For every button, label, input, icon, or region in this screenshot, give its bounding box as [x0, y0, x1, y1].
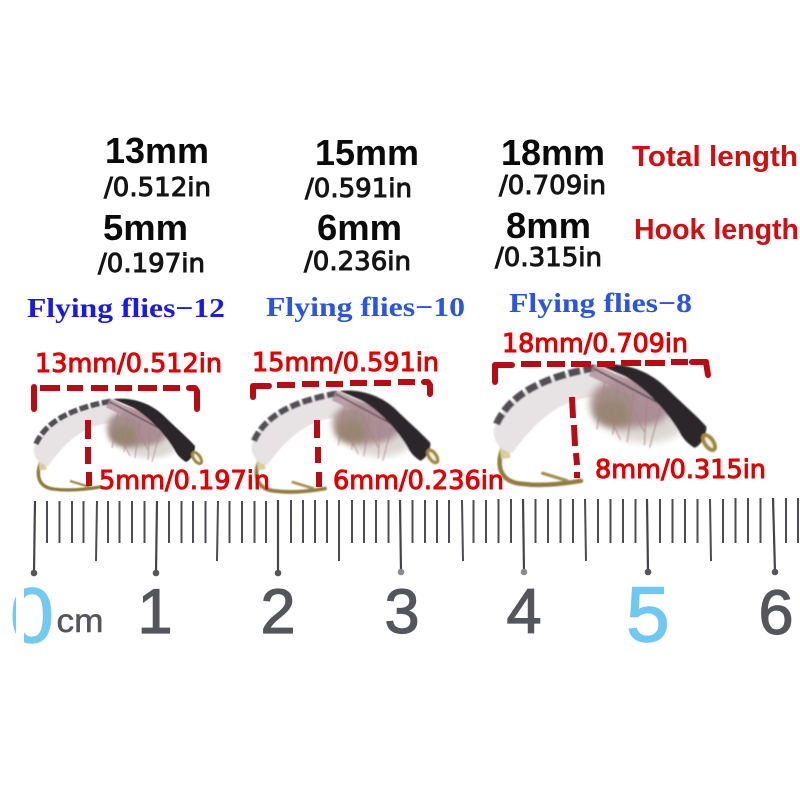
total length 15mm: 15mm: [315, 132, 419, 173]
total length label 2: 15mm/0.591in: [252, 348, 439, 378]
size column: Flying flies-12: [27, 130, 225, 323]
number 1: 1: [137, 577, 173, 647]
ruler: [10, 498, 798, 659]
size column: Flying flies-10: [266, 132, 465, 322]
hook length label 3: 8mm/0.315in: [595, 455, 766, 485]
row label: hook length: Hook length: [634, 214, 799, 246]
hook length label 2: 6mm/0.236in: [333, 466, 504, 496]
number 3: 3: [384, 577, 420, 647]
minor ticks: [47, 498, 798, 543]
total length inches: /0.512in: [104, 173, 211, 203]
hook length label 1: 5mm/0.197in: [99, 466, 270, 496]
half centimetre ticks: [96, 499, 711, 561]
hook length 6mm: 6mm: [317, 207, 402, 248]
total length bracket 3: [495, 362, 708, 382]
centimetre ticks: [34, 498, 775, 572]
total length 18mm: 18mm: [501, 132, 605, 173]
total length 13mm: 13mm: [105, 130, 209, 171]
total length inches: /0.709in: [499, 171, 606, 201]
total length label 1: 13mm/0.512in: [35, 349, 222, 379]
row label: total length: Total length: [632, 141, 798, 173]
hook length marker 2: [317, 420, 319, 487]
name: Flying flies−12: [27, 293, 225, 323]
hook length marker 3: [572, 397, 577, 478]
name: Flying flies−10: [266, 292, 465, 322]
size column: Flying flies-8: [495, 132, 692, 318]
name: Flying flies−8: [509, 288, 692, 318]
total length inches: /0.591in: [305, 174, 412, 204]
number 2: 2: [260, 577, 296, 647]
fly photo 2: [252, 390, 440, 492]
fly photo 1: [34, 399, 203, 490]
total length bracket 2: [253, 382, 430, 397]
unit cm: cm: [56, 602, 104, 639]
fly photo 3: [494, 364, 717, 485]
number 4: 4: [506, 577, 542, 647]
total length bracket 1: [34, 387, 197, 409]
centimetre dots: [31, 569, 778, 576]
number 0: 0: [10, 571, 54, 659]
hook length inches: /0.315in: [495, 243, 602, 273]
number 5: 5: [626, 570, 670, 658]
hook length inches: /0.236in: [304, 247, 411, 277]
hook length inches: /0.197in: [98, 249, 205, 279]
hook length marker 1: [88, 420, 89, 486]
crop gap through the 0: [16, 580, 24, 650]
hook length 5mm: 5mm: [103, 207, 188, 248]
hook length 8mm: 8mm: [506, 205, 591, 246]
total length label 3: 18mm/0.709in: [502, 329, 688, 359]
number 6: 6: [758, 578, 794, 648]
